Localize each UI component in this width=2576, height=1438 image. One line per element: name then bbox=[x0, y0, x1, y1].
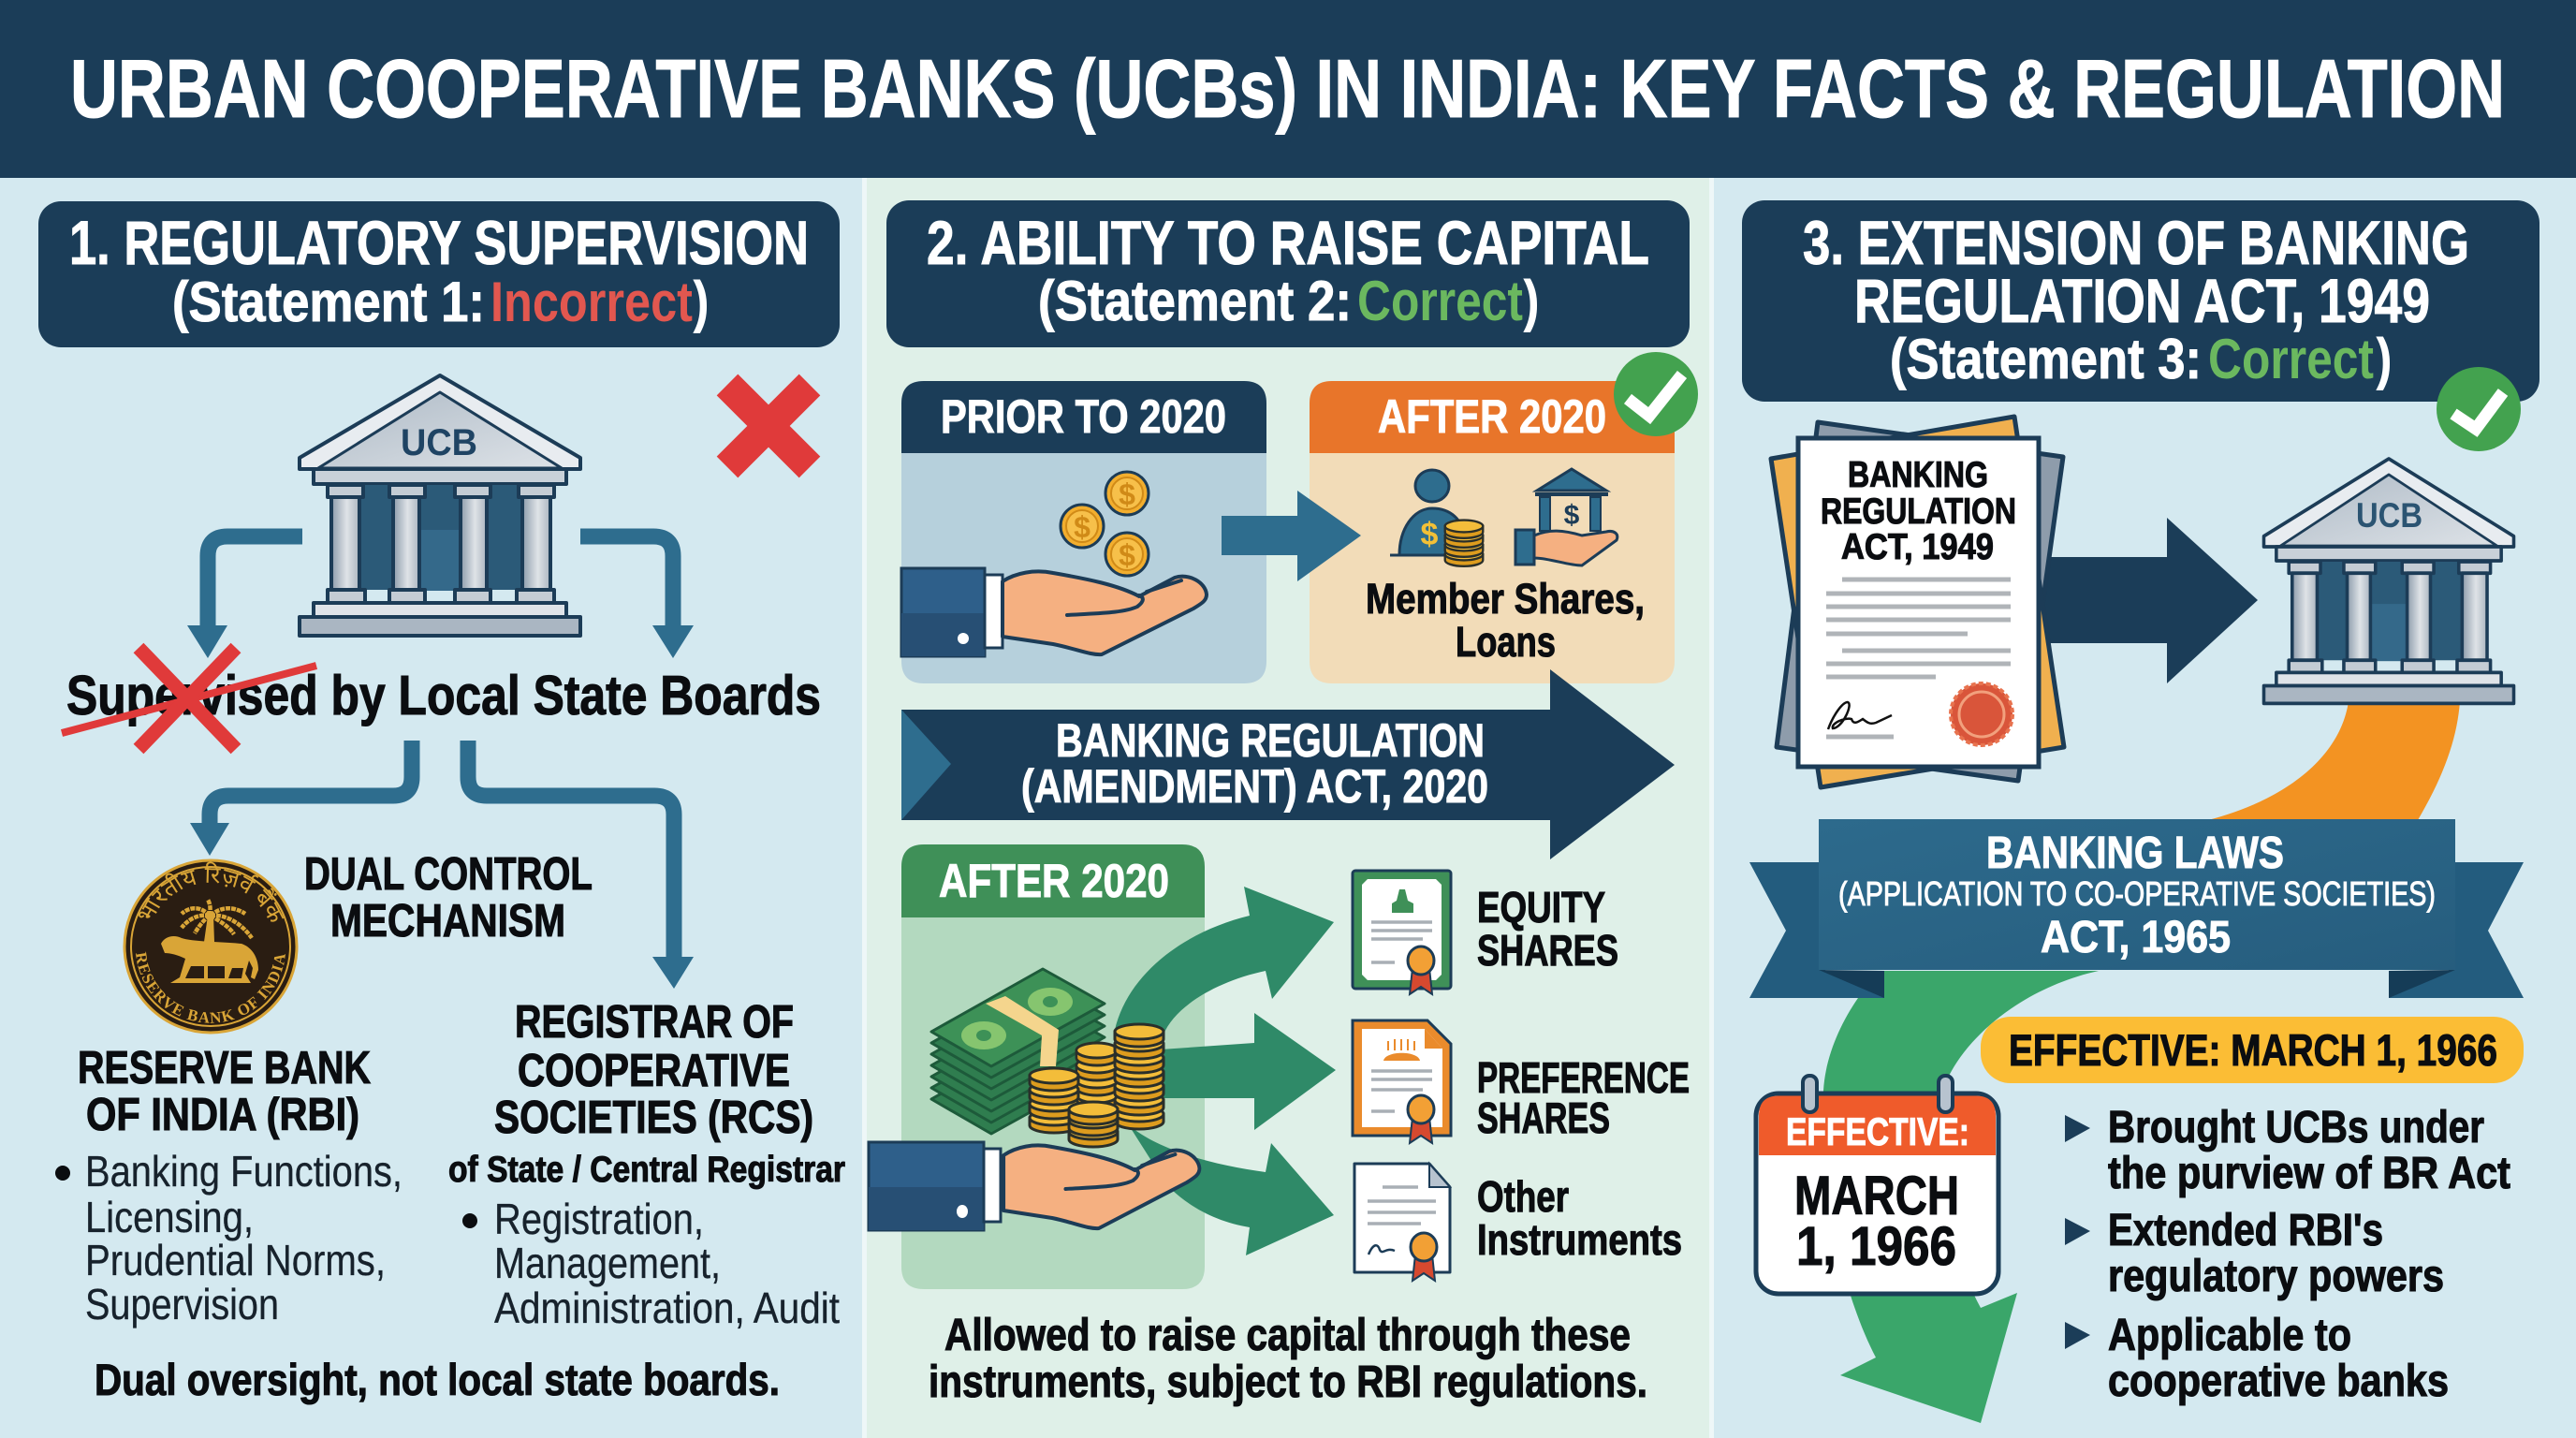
icon: UCB bank bbox=[300, 375, 580, 636]
icon: open hand bbox=[901, 568, 1207, 656]
list: RBI functions: Supervision bbox=[85, 1280, 279, 1328]
heading: panel 2 bbox=[886, 200, 1690, 347]
takeaway: panel 2: instruments, subject to RBI regulations. bbox=[929, 1357, 1647, 1407]
icon: calendar: EFFECTIVE: bbox=[1786, 1109, 1969, 1153]
text: preference shares: SHARES bbox=[1477, 1093, 1610, 1142]
text: other instruments bbox=[1477, 1172, 1682, 1264]
icon: preference certificate bbox=[1353, 1020, 1451, 1143]
document: Banking Regulation Act: ACT, 1949 bbox=[1841, 527, 1994, 567]
heading: panel 1: 1. REGULATORY SUPERVISION bbox=[69, 208, 809, 277]
heading: panel 1: (Statement 1: bbox=[172, 271, 485, 333]
icon: bank on hand bbox=[1515, 469, 1617, 565]
icon: UCB bank: UCB bbox=[401, 422, 477, 463]
heading: panel 1: ) bbox=[694, 271, 709, 333]
text: equity shares: EQUITY bbox=[1477, 883, 1605, 932]
heading: Reserve Bank of India: RESERVE BANK bbox=[78, 1043, 371, 1093]
crossed out statement bbox=[62, 648, 821, 749]
heading: Registrar of Cooperative Societies: COOPERATIVE bbox=[518, 1046, 790, 1096]
list: RCS functions: Management, bbox=[494, 1239, 721, 1287]
icon: calendar: MARCH bbox=[1794, 1166, 1959, 1226]
heading: panel 3: (Statement 3: bbox=[1890, 328, 2202, 390]
heading: panel 3: ) bbox=[2377, 328, 2392, 390]
heading: Registrar of Cooperative Societies: SOCIETIES (RCS) bbox=[494, 1093, 813, 1143]
takeaway: panel 2 bbox=[929, 1311, 1647, 1407]
list: effects of the act bbox=[2065, 1103, 2510, 1406]
icon: other instruments document bbox=[1354, 1164, 1450, 1281]
card: after 2020 capital raising bbox=[901, 844, 1205, 1289]
label: dual control mechanism: MECHANISM bbox=[330, 896, 565, 946]
panel: ability to raise capital bbox=[869, 200, 1698, 1407]
text: other instruments: Other bbox=[1477, 1172, 1569, 1221]
title banner bbox=[0, 0, 2576, 178]
arrows: to instruments bbox=[1115, 887, 1336, 1255]
text: equity shares: SHARES bbox=[1477, 926, 1618, 975]
icon: calendar: 1, 1966 bbox=[1796, 1216, 1956, 1277]
icon: open hand holding money bbox=[869, 1142, 1199, 1230]
icon: RBI seal: भारतीय रिज़र्व बैंक bbox=[139, 861, 285, 922]
icon: cash stack and coins bbox=[931, 969, 1164, 1147]
list: RCS functions: Registration, bbox=[494, 1195, 704, 1243]
arrow: act to bank bbox=[2031, 518, 2258, 683]
icon: coins: $ bbox=[1119, 538, 1135, 572]
list: RBI functions: Banking Functions, bbox=[85, 1147, 402, 1196]
card: prior to 2020 bbox=[901, 381, 1266, 683]
list: RBI functions: Licensing, bbox=[85, 1193, 254, 1241]
icon: coins: $ bbox=[1119, 477, 1135, 511]
card: after 2020 capital raising: AFTER 2020 bbox=[939, 855, 1169, 907]
heading: Reserve Bank of India bbox=[78, 1043, 371, 1140]
document: Banking Regulation Act: REGULATION bbox=[1821, 492, 2016, 532]
heading: Registrar of Cooperative Societies: of State / Central Registrar bbox=[448, 1150, 845, 1190]
panel: extension of banking regulation act bbox=[1742, 200, 2539, 1423]
list: RCS functions bbox=[462, 1195, 840, 1332]
heading: panel 3 bbox=[1742, 200, 2539, 402]
text: other instruments: Instruments bbox=[1477, 1215, 1682, 1264]
panel background: capital bbox=[867, 178, 1709, 1438]
crossed out statement: Supervised by Local State Boards bbox=[66, 665, 821, 726]
text: preference shares bbox=[1477, 1053, 1690, 1142]
arrow: prior to after bbox=[1222, 491, 1361, 581]
icon: coins bbox=[1061, 472, 1149, 576]
takeaway: panel 1: Dual oversight, not local state boards. bbox=[95, 1355, 780, 1404]
heading: panel 1 bbox=[38, 201, 840, 347]
icon: calendar bbox=[1756, 1076, 1998, 1294]
card: after 2020 member shares: Member Shares, bbox=[1366, 575, 1645, 623]
card: after 2020 member shares: Loans bbox=[1456, 618, 1556, 666]
label: dual control mechanism bbox=[304, 849, 593, 946]
icon: RBI seal: RESERVE BANK OF INDIA bbox=[136, 951, 285, 1023]
ribbon: Banking Laws Act 1965: (APPLICATION TO CO-OPERATIVE SOCIETIES) bbox=[1838, 874, 2436, 913]
list: effects of the act: the purview of BR Act bbox=[2108, 1149, 2510, 1198]
icon: UCB bank: UCB bbox=[2356, 496, 2422, 535]
pill: effective date bbox=[1981, 1017, 2524, 1083]
ribbon: Banking Laws Act 1965: ACT, 1965 bbox=[2041, 913, 2231, 962]
heading: Registrar of Cooperative Societies bbox=[448, 997, 845, 1190]
arrows to regulators bbox=[190, 741, 694, 989]
list: RCS functions: Administration, Audit bbox=[494, 1284, 840, 1332]
heading: panel 2: 2. ABILITY TO RAISE CAPITAL bbox=[927, 208, 1649, 277]
icon: RBI seal bbox=[124, 859, 298, 1034]
list: effects of the act: cooperative banks bbox=[2108, 1357, 2449, 1406]
ribbon: Banking Laws Act 1965 bbox=[1749, 819, 2524, 998]
heading: Registrar of Cooperative Societies: REGISTRAR OF bbox=[515, 997, 794, 1048]
text: preference shares: PREFERENCE bbox=[1477, 1053, 1690, 1102]
list: effects of the act: Brought UCBs under bbox=[2108, 1103, 2484, 1152]
icon: incorrect cross bbox=[727, 385, 810, 467]
heading: panel 2: ) bbox=[1524, 270, 1539, 332]
card: after 2020 member shares: AFTER 2020 bbox=[1378, 390, 1606, 443]
list: effects of the act: Extended RBI's bbox=[2108, 1206, 2383, 1255]
arrows from bank bbox=[187, 536, 694, 658]
banner arrow: amendment act bbox=[901, 669, 1675, 859]
card: prior to 2020: PRIOR TO 2020 bbox=[941, 390, 1226, 443]
icon: coins: $ bbox=[1074, 510, 1090, 544]
heading: panel 2: (Statement 2: bbox=[1038, 270, 1352, 332]
heading: panel 3: Correct bbox=[2208, 328, 2374, 390]
icon: bank on hand: $ bbox=[1564, 500, 1580, 531]
list: effects of the act: Applicable to bbox=[2108, 1311, 2351, 1360]
heading: panel 3: REGULATION ACT, 1949 bbox=[1854, 266, 2430, 335]
icon: member with coins bbox=[1390, 470, 1483, 566]
ribbon: Banking Laws Act 1965: BANKING LAWS bbox=[1986, 829, 2284, 878]
swoosh: green arrow bbox=[1823, 971, 2099, 1423]
swoosh: orange bbox=[2208, 701, 2460, 820]
panel: regulatory supervision bbox=[38, 201, 845, 1404]
document: Banking Regulation Act bbox=[1771, 417, 2064, 787]
heading: panel 2: Correct bbox=[1357, 270, 1523, 332]
card: after 2020 member shares bbox=[1310, 381, 1675, 683]
banner arrow: amendment act: BANKING REGULATION bbox=[1056, 714, 1485, 767]
list: RBI functions bbox=[55, 1147, 402, 1328]
icon: green check bbox=[1614, 352, 1698, 436]
icon: member with coins: $ bbox=[1421, 517, 1439, 552]
heading: panel 1: Incorrect bbox=[490, 271, 693, 333]
heading: Reserve Bank of India: OF INDIA (RBI) bbox=[86, 1090, 359, 1140]
label: dual control mechanism: DUAL CONTROL bbox=[304, 849, 593, 900]
document: Banking Regulation Act: BANKING bbox=[1848, 455, 1988, 495]
icon: UCB bank bbox=[2263, 459, 2514, 703]
list: effects of the act: regulatory powers bbox=[2108, 1252, 2444, 1301]
banner arrow: amendment act: (AMENDMENT) ACT, 2020 bbox=[1021, 760, 1488, 813]
list: RBI functions: Prudential Norms, bbox=[85, 1236, 386, 1284]
takeaway: panel 2: Allowed to raise capital through these bbox=[944, 1311, 1631, 1360]
icon: green check bbox=[2437, 367, 2521, 451]
icon: equity certificate bbox=[1353, 871, 1451, 994]
text: equity shares bbox=[1477, 883, 1618, 975]
